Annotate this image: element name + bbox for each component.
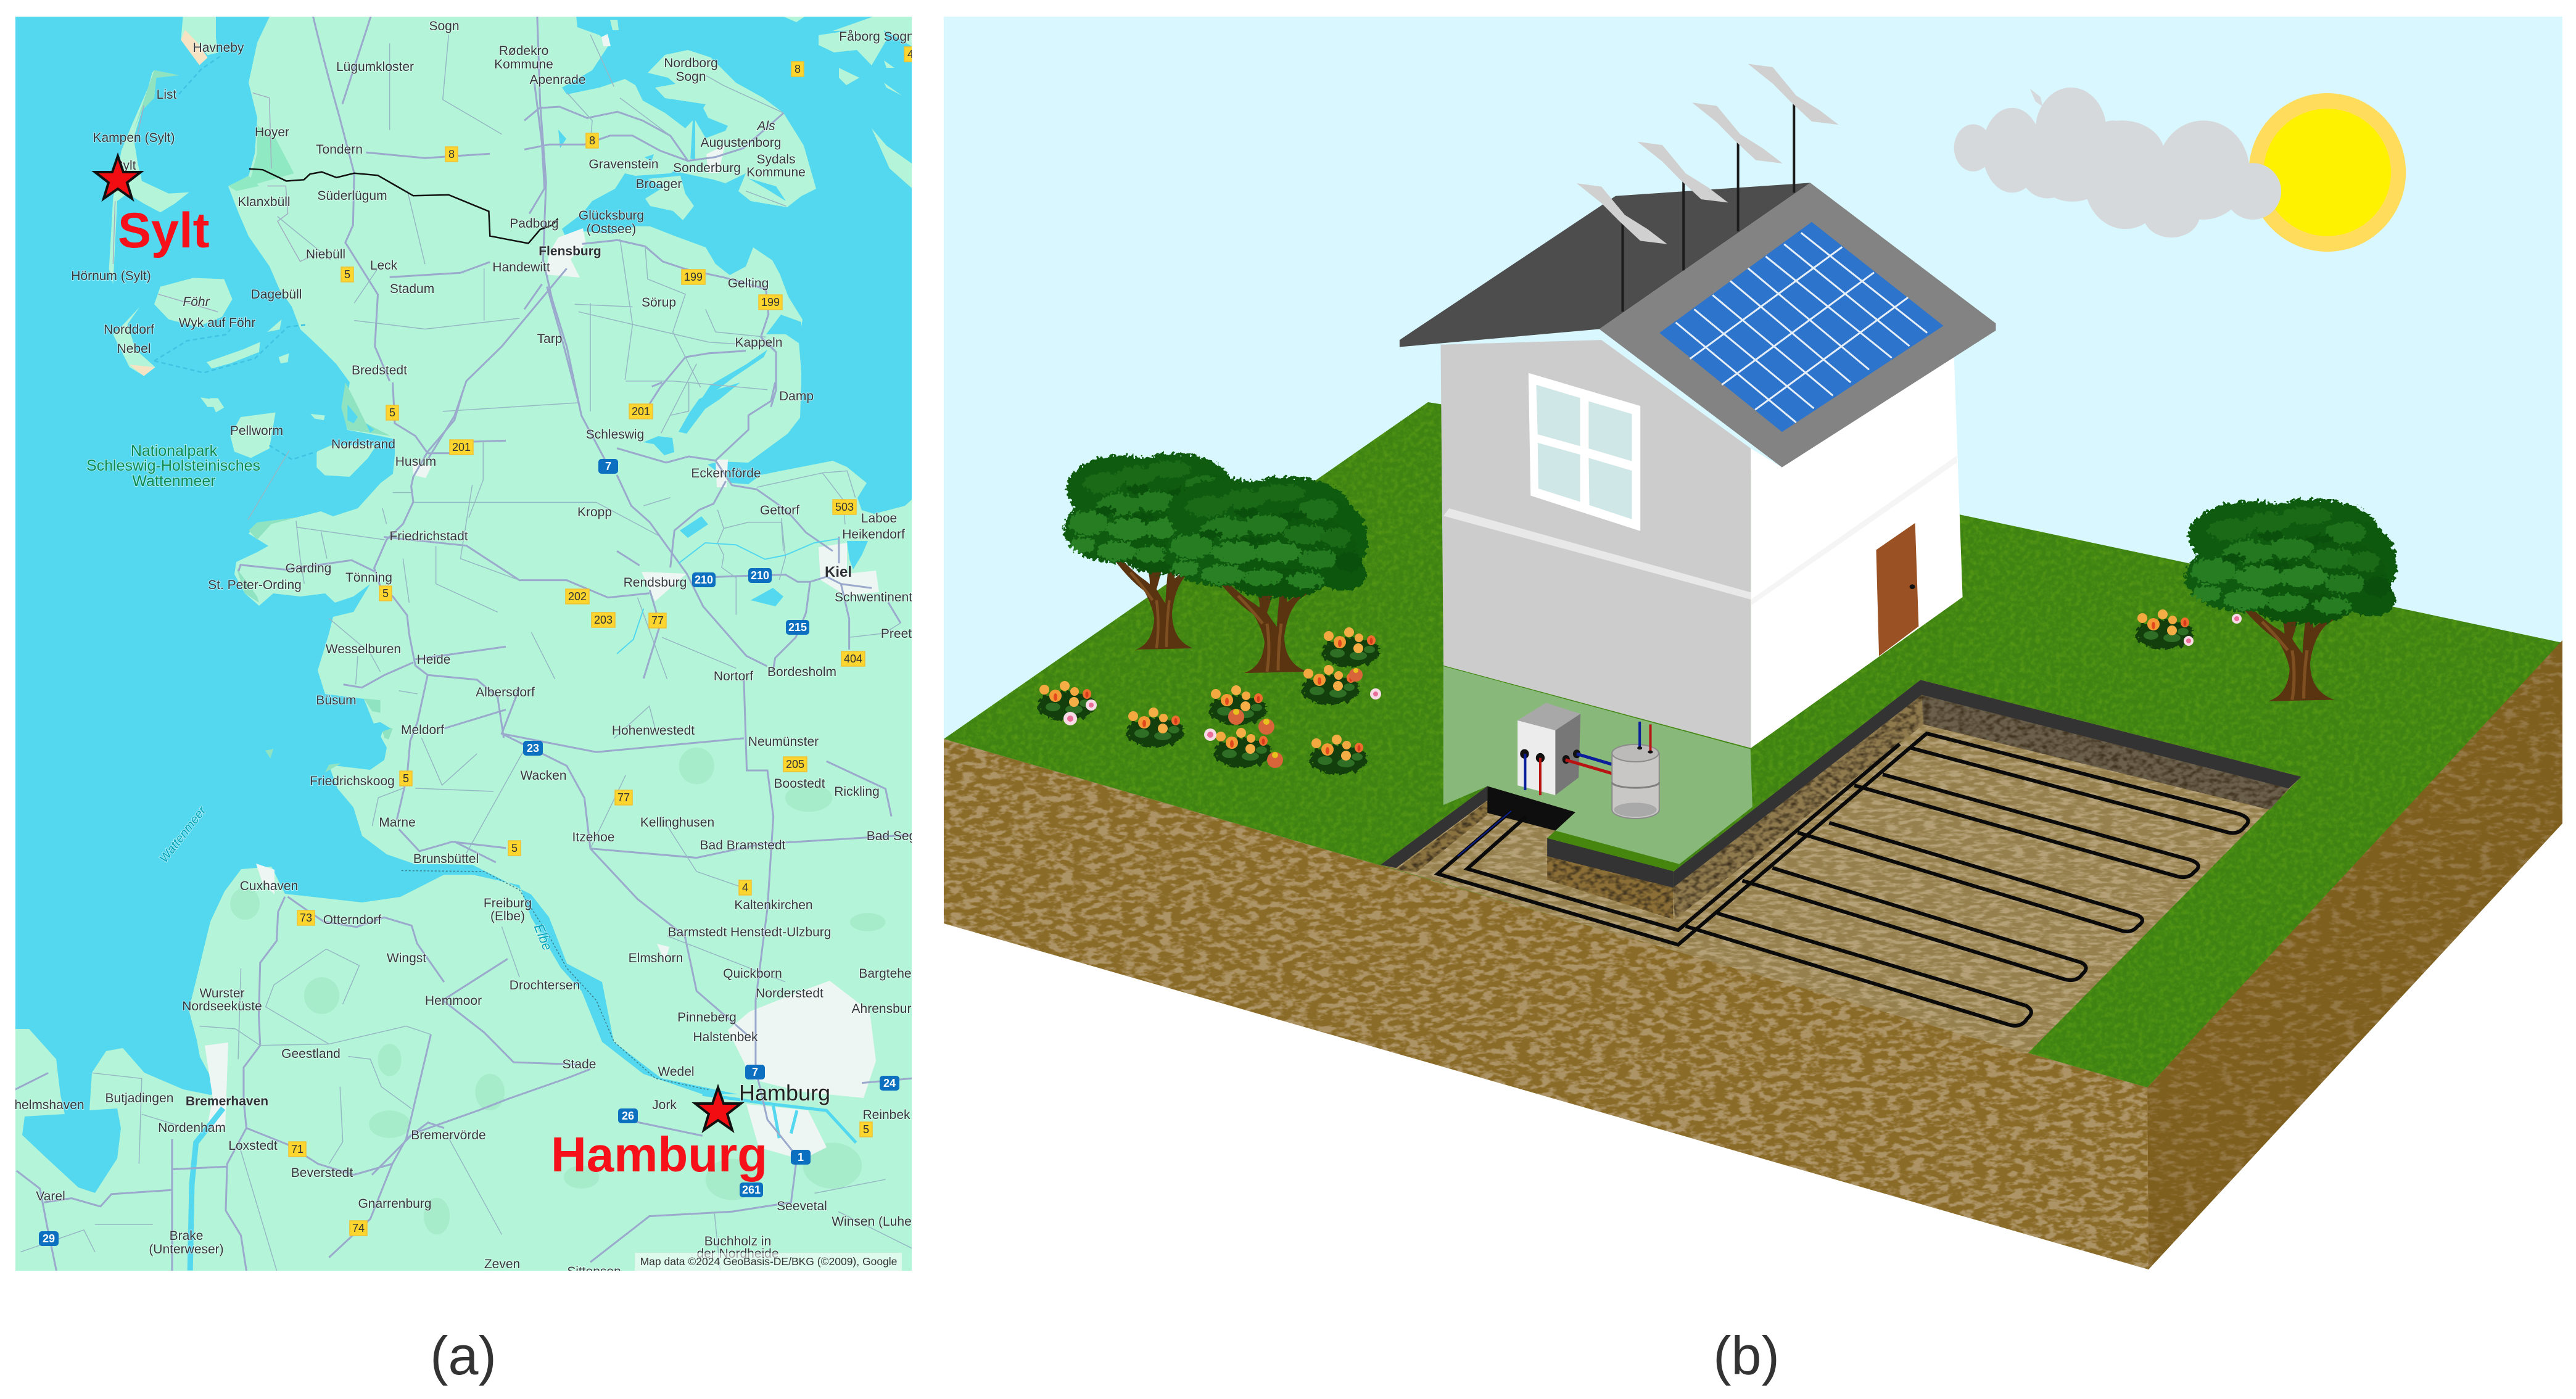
map place labels: Wesselburen <box>326 642 401 656</box>
Weser and Elbe detail <box>190 870 856 1271</box>
attribution <box>635 1253 902 1271</box>
yellow road shields: 5 <box>511 842 518 854</box>
caption (a): (a) <box>430 1325 497 1386</box>
blue motorway shields: 261 <box>742 1184 761 1196</box>
green countryside patches <box>230 748 886 1234</box>
cloud <box>1954 88 2281 237</box>
yellow road shields: 202 <box>568 590 587 603</box>
map place labels: Dagebüll <box>251 287 302 302</box>
map place labels: Hohenwestedt <box>612 724 695 738</box>
house <box>1400 64 1996 748</box>
map place labels: Norderstedt <box>756 986 824 1001</box>
map place labels: Husum <box>395 455 436 469</box>
tree right <box>2185 499 2396 701</box>
map place labels: Wyk auf Föhr <box>179 316 255 330</box>
map place labels: Bargtehe <box>859 967 912 981</box>
yellow road shields: 73 <box>300 912 312 924</box>
turbine blades <box>1577 64 1839 244</box>
map place labels: Nebel <box>117 342 151 356</box>
map place labels: Freiburg <box>484 896 532 910</box>
map place labels: Sylt <box>114 159 136 173</box>
map place labels: Varel <box>36 1189 65 1203</box>
map place labels: Fåborg Sogn <box>839 30 914 44</box>
map place labels: Gravenstein <box>588 157 659 171</box>
Sylt, Rømø, Föhr, Amrum and Halligen <box>109 15 321 407</box>
map place labels: Glücksburg <box>579 208 644 223</box>
map place labels: Winsen (Luhe <box>832 1215 912 1229</box>
map place labels: St. Peter-Ording <box>208 578 302 592</box>
map place labels: Wacken <box>520 769 567 783</box>
map place labels: Neumünster <box>748 735 819 749</box>
map place labels: Broager <box>636 177 682 191</box>
road network Weser area <box>15 897 444 1271</box>
map place labels: Tönning <box>345 571 392 585</box>
map place labels: Zeven <box>484 1257 520 1271</box>
yellow road shields: 5 <box>382 587 389 600</box>
coral and pink flowers <box>1063 614 2242 768</box>
city and settlement areas <box>205 34 879 1160</box>
map place labels: helmshaven <box>14 1098 85 1112</box>
blue motorway shields: 7 <box>605 460 611 473</box>
yellow road shields: 201 <box>632 405 650 418</box>
right wall <box>1751 357 1963 748</box>
flower bush 6 <box>1322 627 1380 667</box>
map place labels: Otterndorf <box>323 913 381 927</box>
road network Als and Angeln <box>524 75 786 407</box>
blue motorway shields: 210 <box>695 574 713 586</box>
map place labels: Hemmoor <box>425 994 482 1008</box>
yellow road shields: 404 <box>844 653 862 665</box>
road network mid south <box>372 679 912 1271</box>
back wall <box>1922 695 2289 810</box>
map place labels: Geestland <box>281 1047 341 1061</box>
blue motorway shields: 1 <box>798 1151 804 1163</box>
map place labels: Kappeln <box>735 336 783 350</box>
door <box>1876 523 1918 656</box>
map place labels: Kampen (Sylt) <box>93 131 175 145</box>
map place labels: Marne <box>379 815 416 830</box>
blue motorway shields: 210 <box>751 569 769 582</box>
blue motorway shields: 23 <box>527 742 539 754</box>
map place labels: Loxstedt <box>228 1139 278 1153</box>
tree left <box>1063 453 1247 650</box>
map place labels: Garding <box>286 561 331 576</box>
grass ground <box>944 402 2562 1087</box>
panel (b): house scene <box>944 17 2562 1269</box>
map place labels: Bordesholm <box>767 665 836 679</box>
yellow road shields: 77 <box>651 614 664 627</box>
map place labels <box>14 19 916 1279</box>
blue motorway shields: 29 <box>43 1232 55 1245</box>
map place labels: Schleswig-Holsteinisches <box>86 457 260 474</box>
map place labels: Nationalpark <box>131 442 218 460</box>
pit floor <box>1381 680 2301 1054</box>
map place labels: Barmstedt Henstedt-Ulzburg <box>668 925 831 939</box>
blue motorway shields: 7 <box>752 1066 758 1078</box>
map place labels: Sogn <box>675 70 706 84</box>
map place labels: Elmshorn <box>629 951 683 965</box>
map place labels: Kaltenkirchen <box>734 898 813 912</box>
yellow road shields: 199 <box>761 296 780 308</box>
left wall <box>1440 340 1751 748</box>
map place labels: Wattenmeer <box>132 473 216 490</box>
map place labels: Eckernförde <box>691 466 761 481</box>
yellow road shields: 71 <box>291 1143 303 1155</box>
dark rim <box>1381 680 2301 888</box>
side wall <box>1673 695 1923 919</box>
map place labels: Rickling <box>834 785 880 799</box>
yellow road shields: 503 <box>835 501 854 513</box>
map place labels: Handewitt <box>492 260 550 274</box>
map place labels: Stadum <box>390 282 434 296</box>
map place labels: Lügumkloster <box>336 60 414 74</box>
yellow road shields: 4 <box>742 881 748 894</box>
map place labels: Itzehoe <box>572 830 614 844</box>
map place labels: Ahrensbur <box>852 1002 911 1016</box>
attribution: Map data ©2024 GeoBasis-DE/BKG (©2009), Google <box>640 1255 897 1268</box>
flower bush 5 <box>1302 665 1360 704</box>
map place labels: Kellinghusen <box>640 815 714 830</box>
gable roof <box>1600 183 1996 468</box>
excavated pit <box>1381 680 2301 1054</box>
map place labels: Boostedt <box>774 777 825 791</box>
map place labels: Tarp <box>537 332 562 346</box>
panel (a): map of northern Germany <box>14 13 917 1279</box>
green strip by foundation <box>1547 831 1679 871</box>
yellow road shields: 5 <box>344 268 350 281</box>
sky <box>944 17 2562 1087</box>
map place labels: Tondern <box>316 142 363 157</box>
map place labels: Beverstedt <box>291 1166 353 1180</box>
flower bush 3 <box>1209 685 1267 725</box>
marker: Sylt star <box>95 156 141 199</box>
yellow road shields: 8 <box>795 63 801 75</box>
wall bands <box>1443 455 1957 606</box>
solar panel <box>1659 222 1944 432</box>
map place labels: Bremervörde <box>411 1128 486 1142</box>
map place labels: Kommune <box>746 165 806 180</box>
yellow road shields: 74 <box>352 1222 365 1234</box>
map place labels: Augustenborg <box>701 136 781 150</box>
map place labels: Bad Seg <box>867 829 916 843</box>
yellow road shields: 205 <box>786 758 804 770</box>
label: Hamburg: Hamburg <box>551 1127 767 1182</box>
yellow road shields: 8 <box>448 148 455 160</box>
map place labels: Norddorf <box>104 323 154 337</box>
map place labels: Seevetal <box>777 1199 827 1213</box>
map place labels: Klanxbüll <box>237 195 291 209</box>
flower bush 8 <box>2136 609 2194 649</box>
map place labels: Sittensen <box>567 1265 621 1279</box>
yellow road shields: 77 <box>617 791 630 804</box>
flower bush 4 <box>1214 728 1272 767</box>
map place labels: Halstenbek <box>693 1030 758 1044</box>
North Sea and Elbe estuary <box>15 17 738 1193</box>
map place labels: Schwentinent <box>835 590 912 605</box>
yellow road shields: 5 <box>403 772 409 785</box>
yellow road shields: 5 <box>863 1123 869 1136</box>
inland waters <box>558 130 868 606</box>
flower bush 2 <box>1126 708 1184 747</box>
map place labels: der Nordheide <box>696 1247 779 1261</box>
blue motorway shields: 215 <box>788 621 807 633</box>
map place labels: Sörup <box>642 295 676 310</box>
map place labels: Brake <box>170 1229 203 1243</box>
yellow road shields <box>289 47 917 1236</box>
map place labels: Flensburg <box>539 244 601 258</box>
map place labels: Hörnum (Sylt) <box>71 269 151 283</box>
map place labels: Brunsbüttel <box>413 852 479 866</box>
map place labels: Wattenmeer <box>157 804 209 865</box>
map place labels: Büsum <box>316 693 357 708</box>
map place labels: List <box>157 88 177 102</box>
map place labels: Süderlügum <box>317 189 387 203</box>
map place labels: Friedrichstadt <box>389 529 468 543</box>
water storage tank <box>1612 722 1659 819</box>
map place labels: Nortorf <box>714 669 753 683</box>
map place labels: (Ostsee) <box>587 222 636 236</box>
map place labels: Kommune <box>494 57 553 72</box>
yellow road shields: 8 <box>589 134 595 147</box>
turbine poles <box>1622 99 1794 312</box>
map place labels: Gelting <box>728 276 769 291</box>
left wall <box>1396 801 1487 872</box>
blue motorway shields: 24 <box>883 1077 896 1089</box>
land base <box>15 17 912 1271</box>
map place labels: Wurster <box>199 986 245 1001</box>
pit black opening <box>1487 786 1575 831</box>
map place labels: Hamburg <box>739 1080 830 1105</box>
Baltic islands and peninsulas <box>610 15 912 220</box>
map place labels: Drochtersen <box>510 978 580 993</box>
map place labels: Havneby <box>193 41 244 55</box>
dark roof <box>1400 183 1810 347</box>
map place labels: Kropp <box>577 505 612 519</box>
map place labels: Nordstrand <box>331 437 395 452</box>
map place labels: Elbe <box>531 922 555 952</box>
map place labels: Albersdorf <box>476 685 535 700</box>
window <box>1529 373 1640 531</box>
Pellworm, Nordstrand and tidal area <box>210 382 393 772</box>
blue motorway shields <box>39 459 899 1246</box>
map place labels: Jork <box>652 1098 677 1112</box>
map place labels: Reinbek <box>862 1108 910 1122</box>
soil front side <box>944 739 2149 1269</box>
map place labels: Gnarrenburg <box>358 1197 432 1211</box>
map place labels: Hoyer <box>255 125 289 139</box>
yellow road shields: 5 <box>389 406 395 419</box>
map place labels: Kiel <box>825 564 852 580</box>
yellow road shields: 4 <box>907 48 914 60</box>
map place labels: Nordseeküste <box>182 999 262 1013</box>
sun <box>2248 93 2406 252</box>
map place labels: Laboe <box>861 511 897 526</box>
map place labels: Heikendorf <box>842 527 905 542</box>
map place labels: (Elbe) <box>490 909 525 923</box>
soil right side <box>2147 640 2562 1269</box>
map place labels: Cuxhaven <box>240 879 298 893</box>
map place labels: Buchholz in <box>704 1234 771 1248</box>
map place labels: Sonderburg <box>673 161 741 175</box>
Baltic Sea <box>562 15 912 514</box>
map place labels: Rødekro <box>499 44 548 58</box>
map place labels: Padborg <box>510 217 559 231</box>
flower bush 1 <box>1038 681 1096 720</box>
map place labels: Apenrade <box>529 73 586 87</box>
map place labels: Meldorf <box>401 723 444 737</box>
map place labels: Butjadingen <box>105 1091 173 1105</box>
map place labels: Nordenham <box>158 1121 226 1135</box>
flower bush 7 <box>1310 735 1368 774</box>
blue motorway shields: 26 <box>622 1110 634 1122</box>
road network north <box>248 13 774 679</box>
map place labels: Pinneberg <box>677 1010 737 1025</box>
label: Sylt: Sylt <box>118 203 210 258</box>
map place labels: Sogn <box>429 19 460 33</box>
road network Kiel area <box>617 382 901 679</box>
map place labels: Föhr <box>183 295 210 309</box>
heat pump unit <box>1517 703 1615 795</box>
map place labels: Rendsburg <box>624 576 687 590</box>
map place labels: (Unterweser) <box>149 1242 224 1257</box>
yellow road shields: 199 <box>684 271 703 283</box>
map place labels: Wedel <box>658 1065 695 1079</box>
map place labels: Damp <box>779 389 814 403</box>
map place labels: Bremerhaven <box>186 1094 268 1108</box>
map place labels: Niebüll <box>306 247 345 262</box>
foundation translucent area <box>1443 666 1752 864</box>
yellow road shields: 201 <box>452 441 471 453</box>
map place labels: Preet <box>881 627 912 641</box>
map place labels: Wingst <box>387 951 426 965</box>
map place labels: Pellworm <box>230 424 283 438</box>
ground heat collector pipes <box>1438 733 2248 1026</box>
tree centre <box>1164 477 1368 673</box>
map place labels: Quickborn <box>723 967 782 981</box>
yellow road shields: 203 <box>594 614 613 626</box>
map place labels: Heide <box>417 653 450 667</box>
caption (b): (b) <box>1713 1325 1780 1386</box>
map place labels: Sydals <box>756 152 796 167</box>
map place labels: Nordborg <box>664 56 718 70</box>
map place labels: Leck <box>370 258 398 273</box>
soil block <box>1547 856 1673 919</box>
map place labels: Friedrichskoog <box>310 774 395 788</box>
marker: Hamburg star <box>695 1087 741 1130</box>
map place labels: Bredstedt <box>352 363 407 378</box>
road network Eiderstedt and Dithmarschen <box>239 382 506 851</box>
map place labels: Schleswig <box>586 427 644 442</box>
map place labels: Gettorf <box>760 503 799 518</box>
map place labels: Stade <box>563 1057 596 1071</box>
map place labels: Bad Bramstedt <box>700 838 786 852</box>
Denmark-Germany border <box>249 169 558 244</box>
map place labels: Als <box>756 119 775 133</box>
